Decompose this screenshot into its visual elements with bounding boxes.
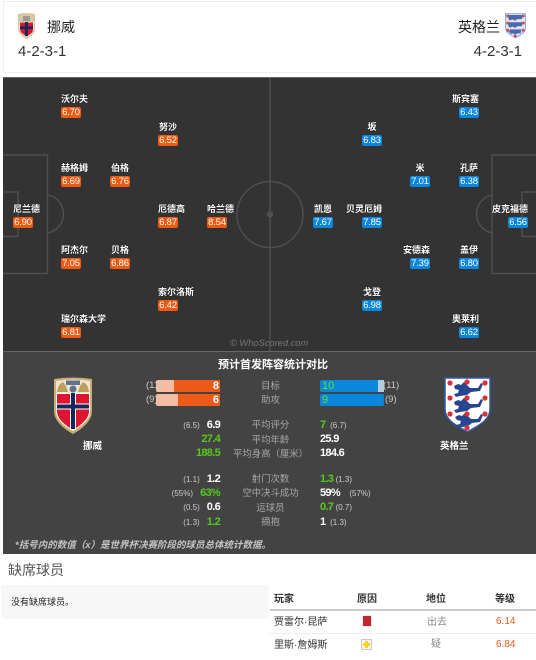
player: 沃尔夫: 6.70 <box>62 107 80 118</box>
panel: pitch <box>3 77 536 351</box>
bar: goals Norway: (11) <box>146 380 162 391</box>
label: England: 英格兰 <box>440 441 469 452</box>
icon: Norway crest small <box>18 13 35 39</box>
stat label: goals: 目标 <box>261 380 280 391</box>
player: 哈兰德: 哈兰德 <box>207 204 234 214</box>
row 2 rating: 6.84 <box>496 639 515 650</box>
bar: assists England <box>320 394 397 406</box>
footnote: *括号内的数值（x）是世界杯决赛阶段的球员总体统计数据。 <box>15 540 271 551</box>
player: 盖伊 <box>459 244 479 269</box>
player: 努沙: 6.52 <box>159 135 177 146</box>
player: 尼兰德 <box>13 204 40 228</box>
player: 尼兰德: 尼兰德 <box>13 204 40 214</box>
table header: rating: 等级 <box>495 594 515 605</box>
stat label: assists: 助攻 <box>261 394 280 405</box>
player: 尼兰德: 6.90 <box>14 217 32 228</box>
player: 厄德高: 厄德高 <box>158 204 185 214</box>
player: 贝灵厄姆: 7.85 <box>363 217 381 228</box>
player: 贝格: 贝格 <box>111 245 129 255</box>
bar: assists England: (9) <box>385 394 397 405</box>
player: 凯恩 <box>313 204 333 228</box>
stat: shots England: 1.3 (1.3) <box>320 473 352 485</box>
player: 伯格: 伯格 <box>111 163 129 173</box>
player: 瑞尔森大学: 6.81 <box>62 327 80 338</box>
player: 坂 <box>362 122 382 146</box>
bar: assists Norway <box>146 394 220 406</box>
row 1 player: 贾雷尔·昆萨 <box>274 617 327 628</box>
player: 皮克福德: 皮克福德 <box>492 204 528 214</box>
player: 米: 米 <box>415 163 424 173</box>
panel: no missing players: 没有缺席球员。 <box>11 597 74 607</box>
player: 凯恩: 7.67 <box>314 217 332 228</box>
team name: Norway: 挪威 <box>47 19 75 35</box>
player: 孔萨 <box>459 162 479 187</box>
table header: player: 玩家 <box>274 594 294 605</box>
table: missing players <box>270 585 536 660</box>
stat label: age: 平均年龄 <box>252 434 289 445</box>
player: 赫格姆 <box>61 162 88 187</box>
player: 沃尔夫: 沃尔夫 <box>61 94 88 104</box>
player: 索尔洛斯 <box>158 286 194 311</box>
stat: tackles Norway: (1.3) 1.2 <box>183 516 220 528</box>
stat: dribbles Norway: (0.5) 0.6 <box>183 501 220 513</box>
player: 戈登 <box>362 286 382 311</box>
bar: goals England: 10 <box>322 380 334 392</box>
player: 凯恩: 凯恩 <box>314 204 332 214</box>
stat: rating England: 7 (6.7) <box>320 419 347 431</box>
stat: shots Norway: (1.1) 1.2 <box>183 473 220 485</box>
row 2 status: 疑 <box>431 639 441 650</box>
player: 安德森: 安德森 <box>403 245 430 255</box>
stat: aerials England: 59% (57%) <box>320 487 371 499</box>
stat label: dribbles: 运球员 <box>256 502 285 513</box>
player: 贝灵厄姆 <box>346 204 382 228</box>
player: 阿杰尔: 7.05 <box>62 258 80 269</box>
bar: assists England: 9 <box>322 394 328 406</box>
watermark: © WhoScored.com <box>230 338 308 348</box>
icon: red card <box>363 616 371 626</box>
player: 伯格: 6.76 <box>111 176 129 187</box>
formation: England: 4-2-3-1 <box>474 43 522 60</box>
player: 赫格姆: 6.69 <box>62 176 80 187</box>
stat: age Norway: 27.4 <box>201 433 220 445</box>
player: 米: 7.01 <box>411 176 429 187</box>
player: 阿杰尔: 阿杰尔 <box>61 245 88 255</box>
icon: doubtful <box>361 639 372 650</box>
player: 米 <box>410 162 430 187</box>
row 2 player: 里斯·詹姆斯 <box>274 640 327 651</box>
panel: stats comparison <box>3 351 536 554</box>
stat: age England: 25.9 <box>320 433 339 445</box>
bar: assists Norway: (9) <box>146 394 158 405</box>
bar: goals England <box>320 380 399 392</box>
icon: England crest <box>444 377 491 433</box>
player: 瑞尔森大学 <box>61 314 106 338</box>
player: 皮克福德 <box>492 204 528 228</box>
row 1 status: 出去 <box>427 617 447 628</box>
player: 瑞尔森大学: 瑞尔森大学 <box>61 314 106 324</box>
stat label: aerials: 空中决斗成功 <box>242 487 299 498</box>
player: 阿杰尔 <box>61 244 88 269</box>
player: 努沙: 努沙 <box>159 122 177 132</box>
player: 哈兰德 <box>207 204 234 228</box>
team name: England: 英格兰 <box>458 19 500 35</box>
bar: goals England: (11) <box>383 380 399 391</box>
player: 皮克福德: 6.56 <box>509 217 527 228</box>
player: 盖伊: 6.80 <box>460 258 478 269</box>
stat label: height: 平均身高（厘米） <box>233 448 308 459</box>
panel: match header <box>3 1 536 73</box>
player: 孔萨: 孔萨 <box>460 163 478 173</box>
player: 盖伊: 盖伊 <box>460 245 478 255</box>
stat label: tackles: 摘抱 <box>261 516 280 527</box>
stat: rating Norway: (6.5) 6.9 <box>183 419 220 431</box>
stat: dribbles England: 0.7 (0.7) <box>320 501 352 513</box>
player: 孔萨: 6.38 <box>460 176 478 187</box>
player: 奥莱利 <box>452 314 479 338</box>
stats title: 预计首发阵容统计对比 <box>218 359 328 371</box>
player: 哈兰德: 8.54 <box>208 217 226 228</box>
stat: height Norway: 188.5 <box>196 447 220 459</box>
icon: England crest small <box>505 13 526 38</box>
player: 安德森: 7.39 <box>411 258 429 269</box>
player: 伯格 <box>110 162 130 187</box>
bar: assists Norway: 6 <box>213 394 219 406</box>
player: 斯宾塞: 斯宾塞 <box>452 94 479 104</box>
table header: reason: 原因 <box>357 594 377 605</box>
player: 斯宾塞 <box>452 94 479 118</box>
player: 厄德高: 6.87 <box>159 217 177 228</box>
player: 贝灵厄姆: 贝灵厄姆 <box>346 204 382 214</box>
stat label: shots: 射门次数 <box>252 473 289 484</box>
player: 索尔洛斯: 6.42 <box>159 300 177 311</box>
pitch markings <box>3 78 536 351</box>
player: 坂: 坂 <box>367 122 376 132</box>
player: 戈登: 戈登 <box>363 287 381 297</box>
player: 坂: 6.83 <box>363 135 381 146</box>
bar: goals Norway: 8 <box>213 380 219 392</box>
stat label: rating: 平均评分 <box>252 419 289 430</box>
heading: missing players: 缺席球员 <box>8 562 64 578</box>
panel: no missing players <box>1 585 269 619</box>
stat: aerials Norway: (55%) 63% <box>172 487 220 499</box>
player: 沃尔夫 <box>61 94 88 118</box>
player: 戈登: 6.98 <box>363 300 381 311</box>
row 1 rating: 6.14 <box>496 616 515 627</box>
icon: Norway crest <box>54 378 92 434</box>
player: 赫格姆: 赫格姆 <box>61 163 88 173</box>
player: 斯宾塞: 6.43 <box>460 107 478 118</box>
player: 努沙 <box>158 122 178 146</box>
player: 安德森 <box>403 244 430 269</box>
player: 奥莱利: 奥莱利 <box>452 314 479 324</box>
bar: goals Norway <box>146 380 220 392</box>
player: 厄德高 <box>158 204 185 228</box>
table header: status: 地位 <box>426 594 446 605</box>
player: 贝格 <box>110 244 130 269</box>
player: 索尔洛斯: 索尔洛斯 <box>158 287 194 297</box>
label: Norway: 挪威 <box>83 441 102 452</box>
stat: height England: 184.6 <box>320 447 344 459</box>
player: 奥莱利: 6.62 <box>460 327 478 338</box>
stat: tackles England: 1 (1.3) <box>320 516 347 528</box>
player: 贝格: 6.86 <box>111 258 129 269</box>
formation: Norway: 4-2-3-1 <box>18 43 66 60</box>
